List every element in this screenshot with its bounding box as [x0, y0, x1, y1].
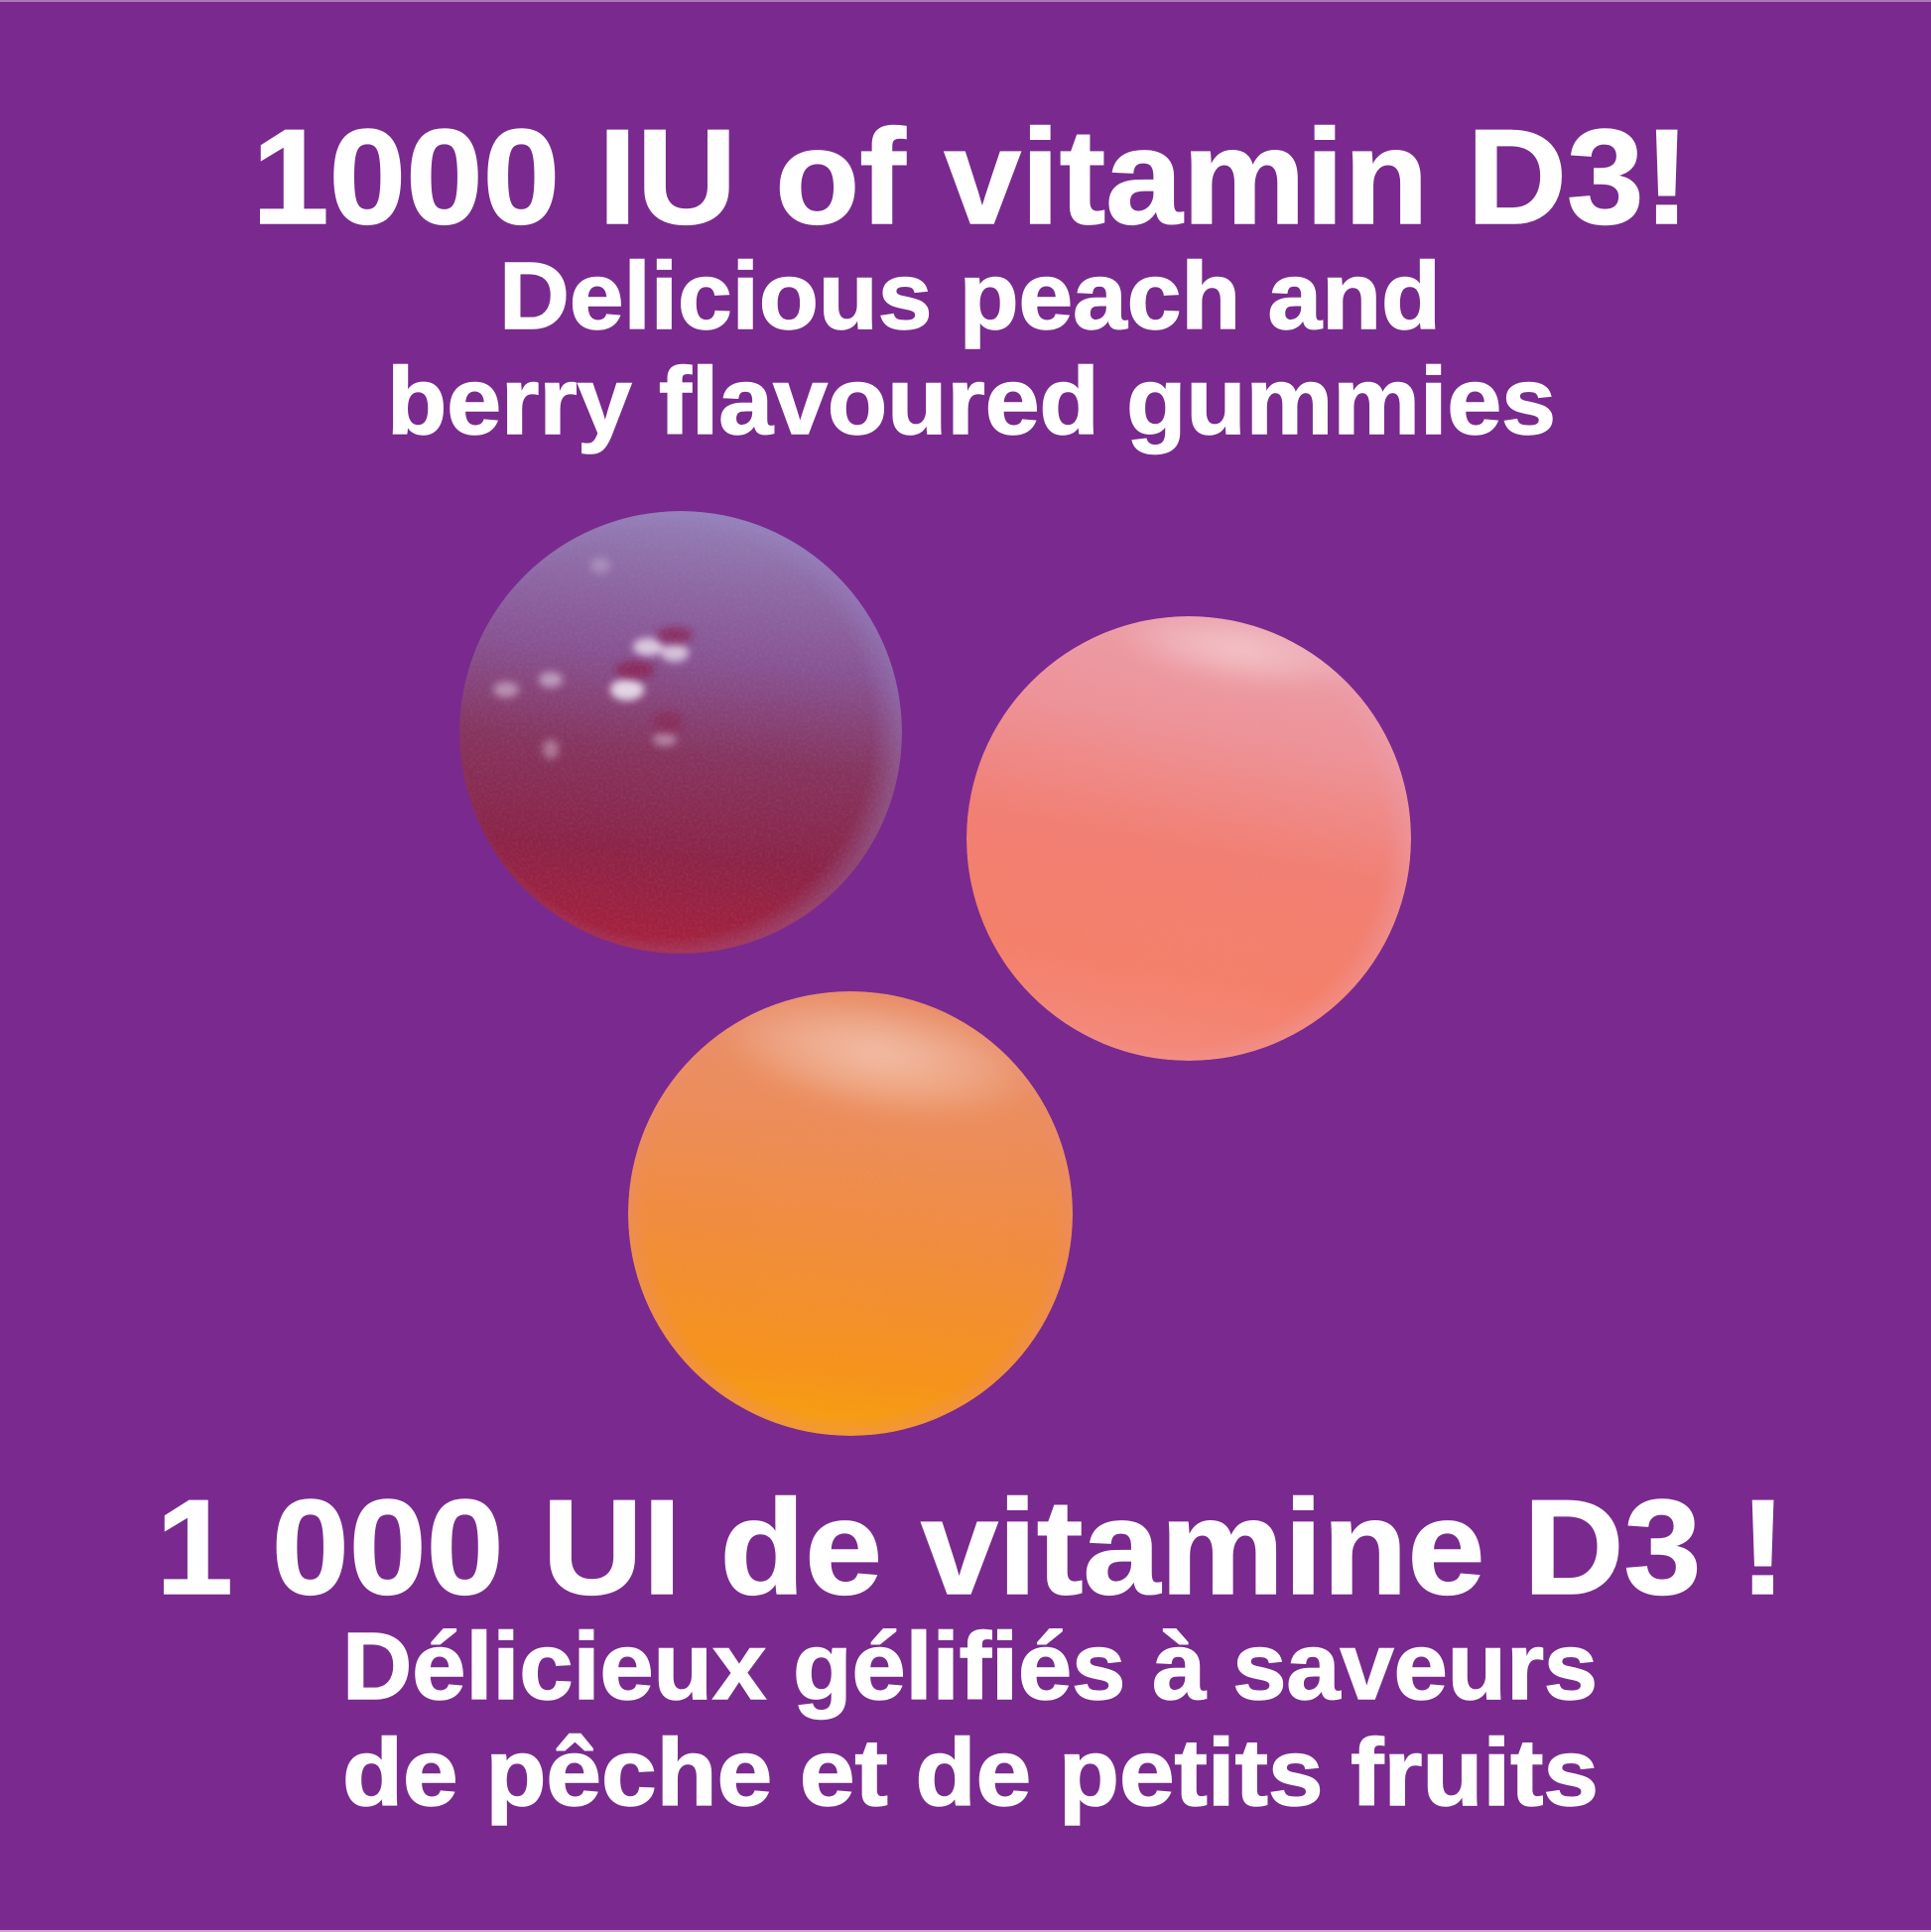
bottom edge highlight: [0, 1930, 1931, 1932]
French title: 1 000 UI de vitamine D3 !: [156, 1472, 1786, 1622]
gummy: peach pink: [966, 599, 1411, 1061]
berry dark dents: [615, 627, 693, 733]
English heading block: [252, 101, 1690, 454]
top edge highlight: [0, 0, 1931, 2]
French subtitle line 2: de pêche et de petits fruits: [342, 1720, 1599, 1826]
French heading block: [156, 1472, 1786, 1826]
French subtitle line 1: Délicieux gélifiés à saveurs: [342, 1613, 1598, 1720]
English subtitle line 1: Delicious peach and: [499, 243, 1441, 349]
orange top sheen: [737, 992, 1020, 1115]
gummy: orange: [628, 965, 1073, 1436]
pink top sheen: [1144, 617, 1334, 683]
orange grain: [630, 993, 1071, 1434]
gummy: berry: [459, 511, 902, 954]
berry surface highlights: [493, 558, 689, 759]
English subtitle line 2: berry flavoured gummies: [387, 348, 1556, 454]
berry grain: [462, 609, 891, 950]
pink grain: [968, 618, 1409, 1059]
English title: 1000 IU of vitamin D3!: [252, 101, 1690, 252]
